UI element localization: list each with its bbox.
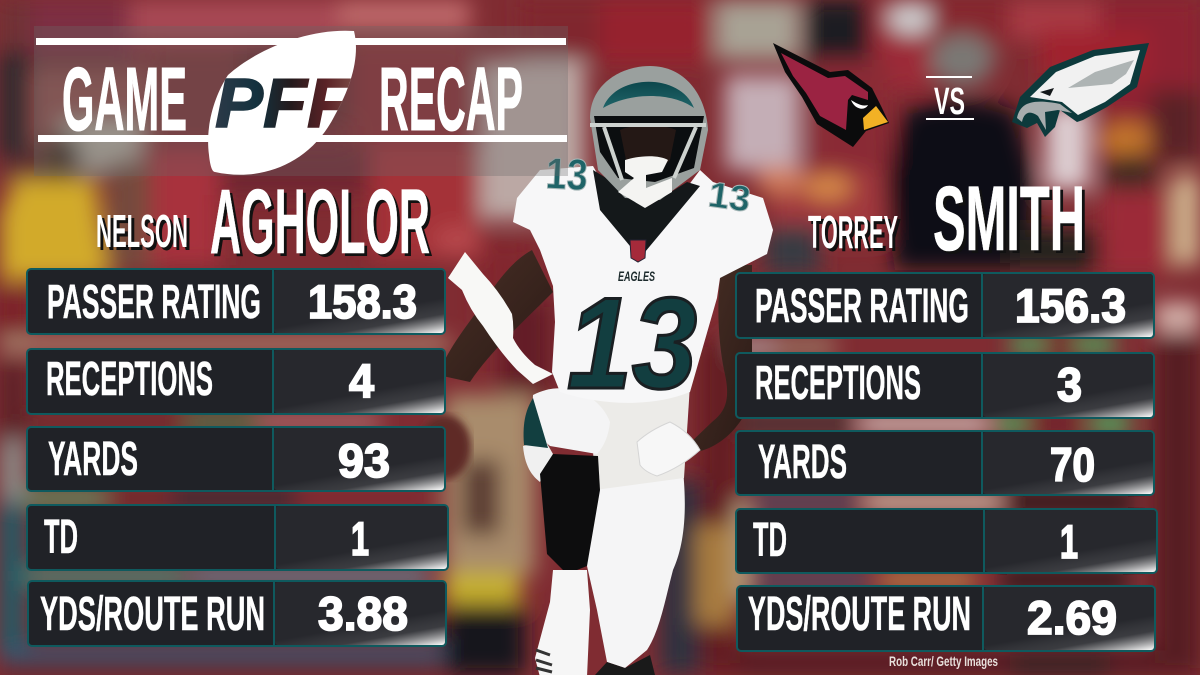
player name: Nelson Agholor: NELSON [99, 208, 191, 260]
stat row: yards per route run: YDS/ROUTE RUN [748, 588, 971, 641]
logo: PFF football [208, 31, 356, 175]
shoulder numbers [544, 149, 753, 220]
player name: Nelson Agholor [96, 171, 433, 276]
stat row: passer rating: 158.3 [308, 275, 417, 328]
text: AGHOLOR [213, 174, 433, 276]
shoulder numbers: 13 [544, 149, 589, 200]
stat row: yards: 70 [1050, 438, 1095, 491]
stat row: receptions: RECEPTIONS [755, 357, 921, 410]
header banner panel: GAME [62, 50, 187, 150]
player name: Torrey Smith: TORREY [808, 206, 898, 258]
stat row: touchdowns: TD [753, 514, 787, 567]
stat row: receptions: RECEPTIONS [46, 353, 213, 406]
shoulder numbers: 13 [706, 173, 753, 220]
stat row: receptions [736, 353, 1154, 418]
helmet [590, 66, 708, 208]
header banner panel: RECAP [379, 50, 523, 150]
header banner panel [34, 26, 568, 176]
player name: Torrey Smith [808, 168, 1088, 273]
photo: Nelson Agholor in white Eagles uniform [419, 66, 773, 675]
photo credit: Rob Carr/ Getty Images [889, 653, 998, 669]
stat row: yards [736, 431, 1154, 495]
stat row: passer rating: PASSER RATING [47, 276, 261, 329]
stat row: yards per route run: YDS/ROUTE RUN [40, 588, 265, 641]
stat row: receptions: 4 [349, 354, 374, 407]
stat row: yards: YARDS [758, 436, 847, 489]
stat row: yards [27, 427, 445, 491]
player name: Torrey Smith: TORREY [811, 209, 901, 261]
panel: Smith stats [736, 273, 1157, 651]
text: AGHOLOR [210, 171, 430, 273]
jersey number 13: 13 [567, 270, 697, 416]
stat row: yards per route run: 2.69 [1027, 591, 1117, 644]
stat row: receptions: 3 [1057, 358, 1082, 411]
player name: Nelson Agholor: NELSON [96, 205, 188, 257]
panel: Agholor stats [27, 269, 448, 646]
stat row: touchdowns: TD [44, 511, 78, 564]
logo: Philadelphia Eagles head [1012, 43, 1149, 137]
stat row: yards: 93 [338, 434, 390, 487]
versus label: VS [934, 81, 965, 123]
stat row: touchdowns [736, 509, 1157, 573]
logo: PFF football: PFF [215, 64, 353, 142]
stat row: passer rating: PASSER RATING [755, 280, 969, 333]
stat row: yards: YARDS [48, 433, 138, 486]
jersey wordmark: EAGLES [618, 268, 655, 284]
towel [448, 252, 553, 384]
stat row: touchdowns: 1 [1060, 515, 1078, 568]
stat row: yards per route run: 3.88 [318, 587, 408, 640]
stat row: passer rating: 156.3 [1015, 279, 1126, 332]
stat row: receptions [27, 349, 445, 414]
stat row: touchdowns: 1 [351, 512, 369, 565]
logo: Arizona Cardinals head [773, 43, 889, 147]
versus label [926, 76, 974, 123]
stat row: touchdowns [27, 505, 448, 570]
